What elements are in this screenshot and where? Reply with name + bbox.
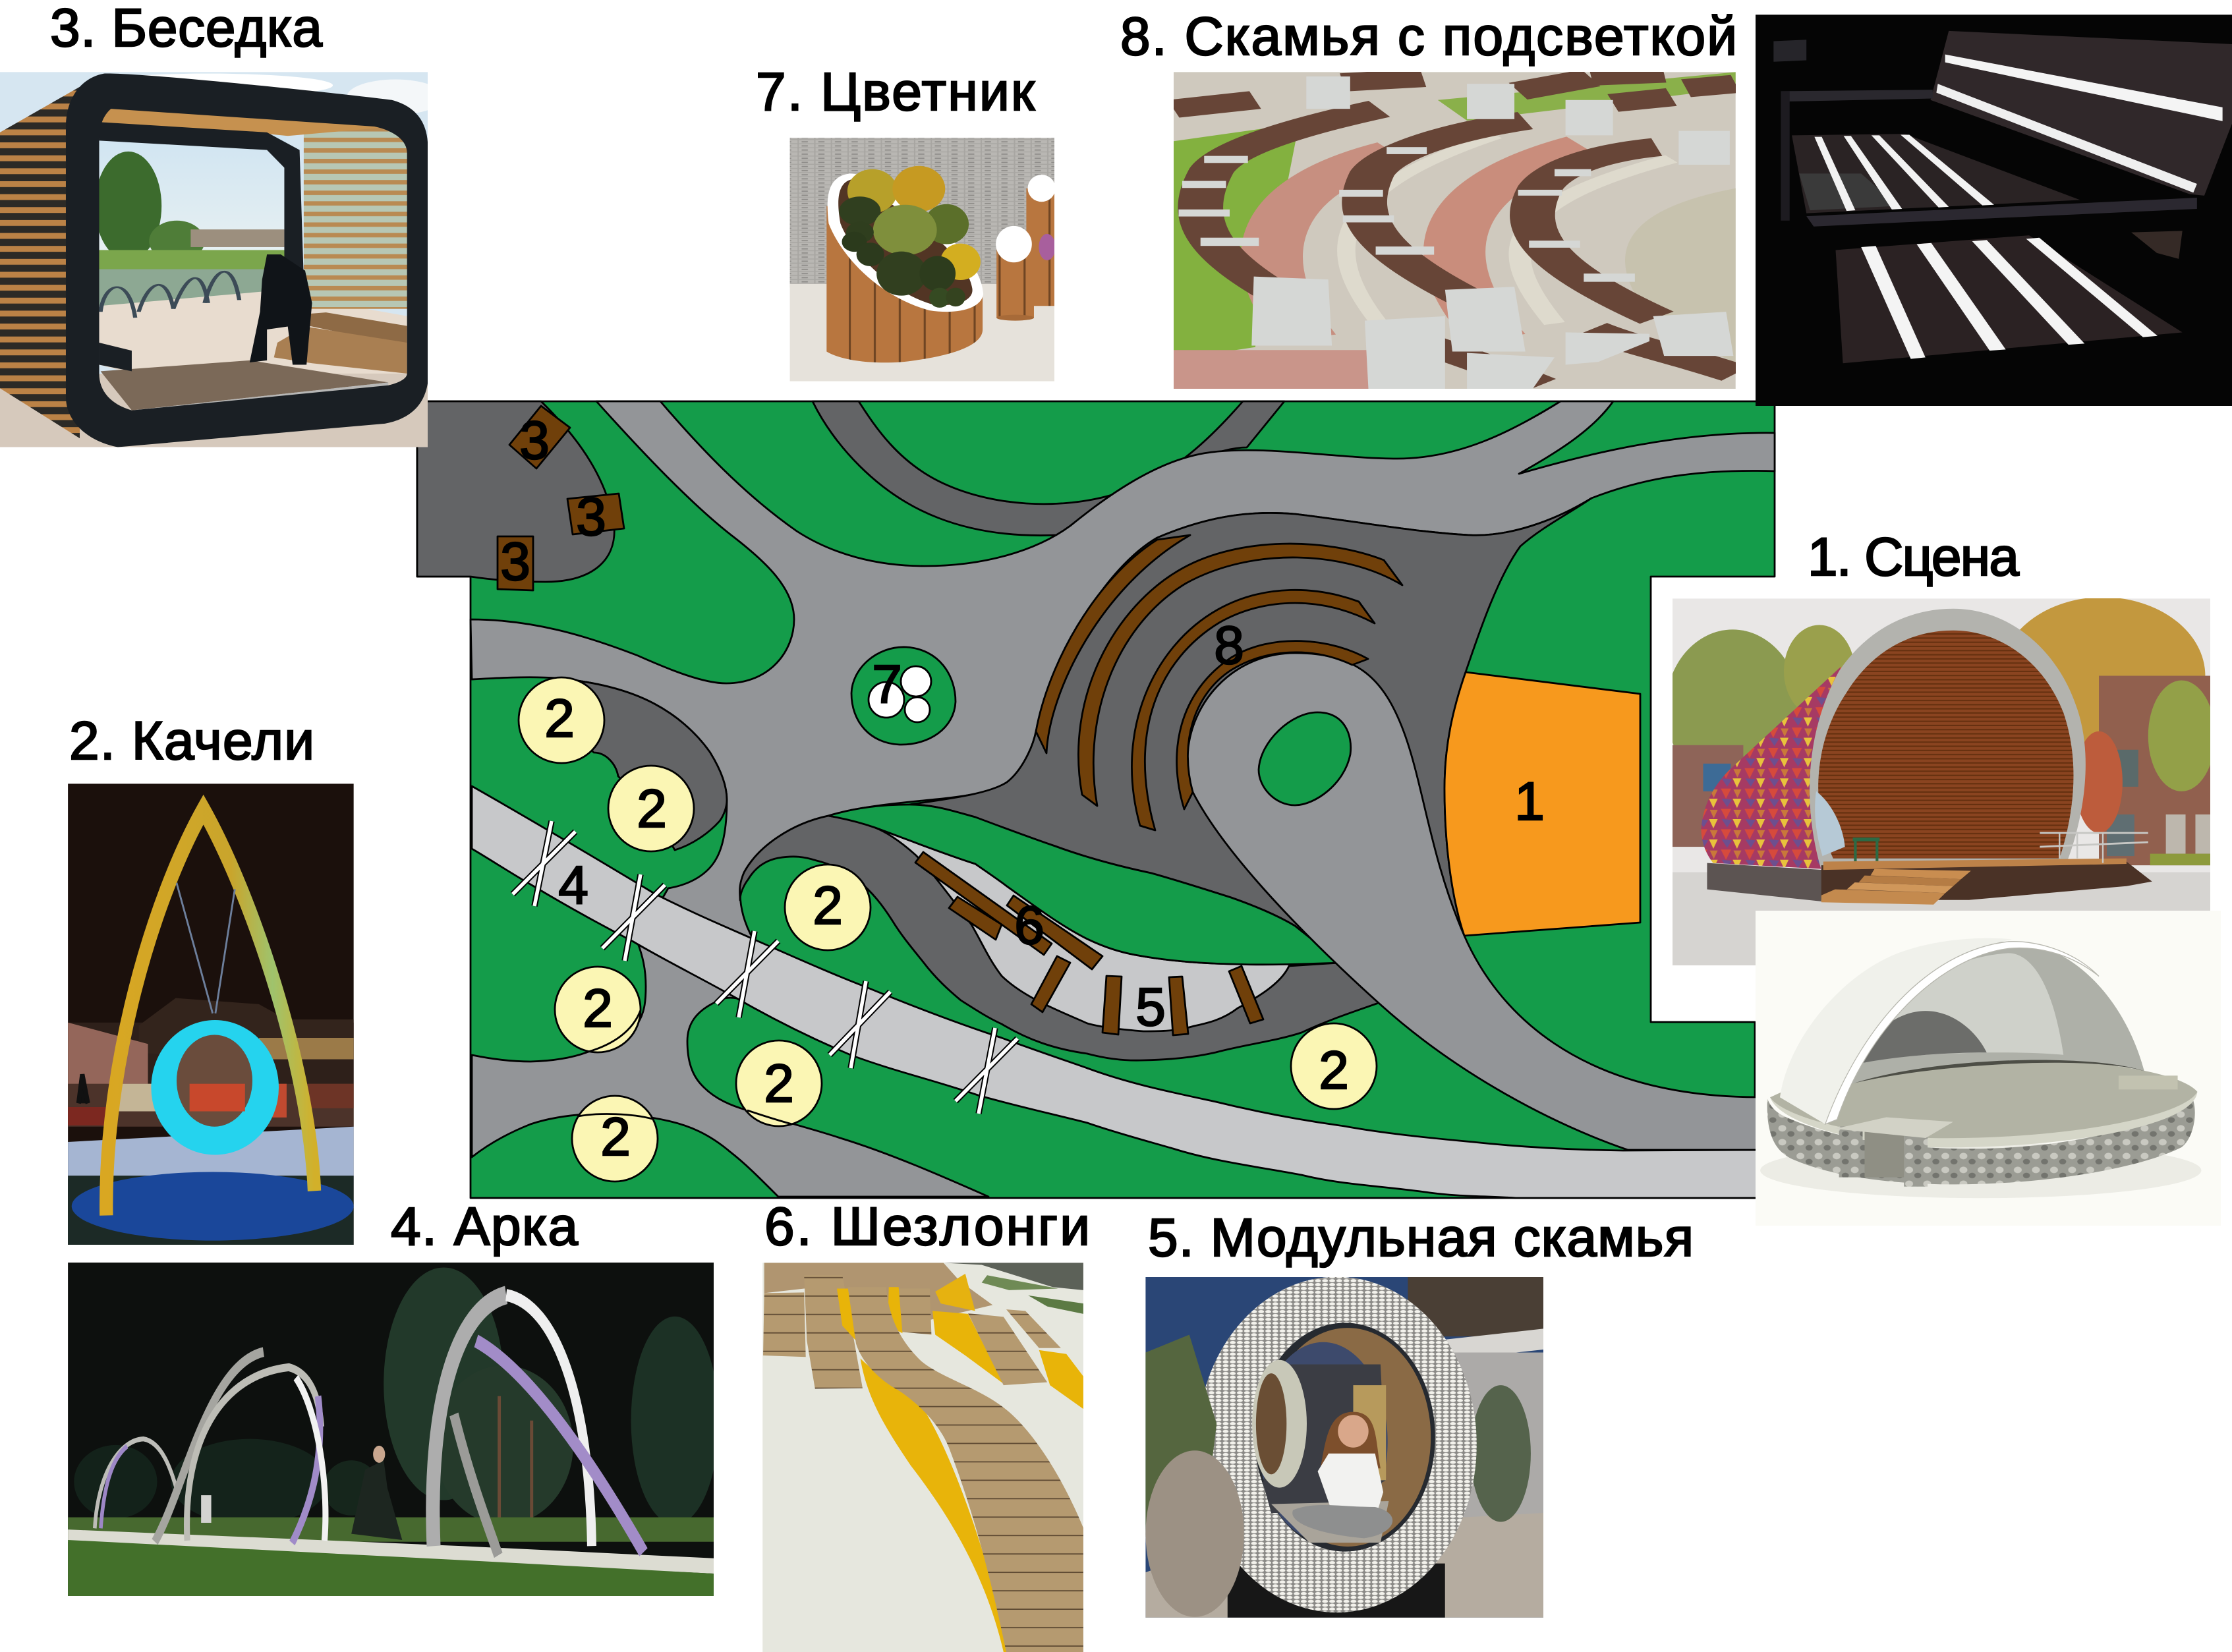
map numerals: 2 xyxy=(637,779,667,839)
green oval inside loop xyxy=(1259,712,1351,805)
map numerals: 8 xyxy=(1214,615,1244,675)
map numerals: 1 xyxy=(1514,772,1545,832)
photo 4: illuminated arches xyxy=(68,1263,719,1596)
map numerals: 3 xyxy=(500,532,530,592)
pale seating area of bench 5 xyxy=(875,828,1340,1031)
map numerals: 2 xyxy=(813,876,843,936)
teardrop loop road xyxy=(1188,653,1760,1150)
heading 2: 2. Качели xyxy=(69,711,314,771)
heading 8: 8. Скамья с подсветкой xyxy=(1120,7,1737,67)
photo 8a: curved stone benches xyxy=(1174,72,1736,389)
photo 6: yellow wave deck chairs xyxy=(762,1263,1083,1652)
heading 1: 1. Сцена xyxy=(1808,527,2019,587)
pale grey arch alley xyxy=(472,786,1760,1198)
map numerals: 2 xyxy=(1319,1040,1349,1100)
dark crescent around upper swings xyxy=(558,678,727,850)
photo 1b: domed stage render xyxy=(1756,911,2221,1226)
arch markers 4 xyxy=(513,821,1017,1114)
heading 4: 4. Арка xyxy=(391,1197,578,1257)
map numerals: 6 xyxy=(1014,896,1044,955)
photo 5: LED ring bench xyxy=(1145,1277,1543,1618)
amphitheatre benches 8 xyxy=(1036,535,1402,830)
map base: green lawn xyxy=(417,401,1775,1198)
deck chairs footprint 6 xyxy=(915,852,1102,969)
dark crescent around lens xyxy=(740,816,1379,1060)
photo 3: gazebo xyxy=(0,72,444,447)
main light grey paths xyxy=(471,401,1775,1197)
map numerals: 2 xyxy=(600,1107,631,1167)
heading 7: 7. Цветник xyxy=(756,62,1035,122)
panel: site plan map xyxy=(417,401,1775,1198)
flower bed island 7 xyxy=(851,647,956,745)
heading 5: 5. Модульная скамья xyxy=(1148,1208,1694,1268)
photo 1a: shell stage xyxy=(1666,597,2215,965)
dark amphitheatre area xyxy=(909,498,1591,963)
island edges crossing circles xyxy=(578,1010,792,1124)
photo 8b: illuminated bench at night xyxy=(1756,14,2232,406)
green lens above bench area xyxy=(828,805,1340,965)
map numerals: 3 xyxy=(519,411,550,470)
map numerals xyxy=(500,411,1545,1167)
swing circles 2 xyxy=(519,677,1377,1182)
photo 2: glowing ring swing xyxy=(68,783,354,1245)
photo 7: flower bed xyxy=(790,138,1056,382)
map numerals: 2 xyxy=(544,689,575,749)
stage footprint 1 xyxy=(1445,672,1640,936)
heading 6: 6. Шезлонги xyxy=(764,1197,1090,1257)
map numerals: 7 xyxy=(872,654,902,714)
dark crescent top centre xyxy=(813,401,1284,536)
map numerals: 3 xyxy=(576,487,606,547)
modular bench markers 5 xyxy=(1031,956,1263,1035)
map numerals: 2 xyxy=(583,979,613,1039)
map numerals: 5 xyxy=(1135,977,1166,1037)
planters xyxy=(869,682,904,718)
map numerals: 2 xyxy=(764,1054,794,1114)
dark paved plaza top left xyxy=(417,401,614,582)
gazebo footprints 3 xyxy=(498,406,624,590)
map numerals: 4 xyxy=(558,855,588,915)
